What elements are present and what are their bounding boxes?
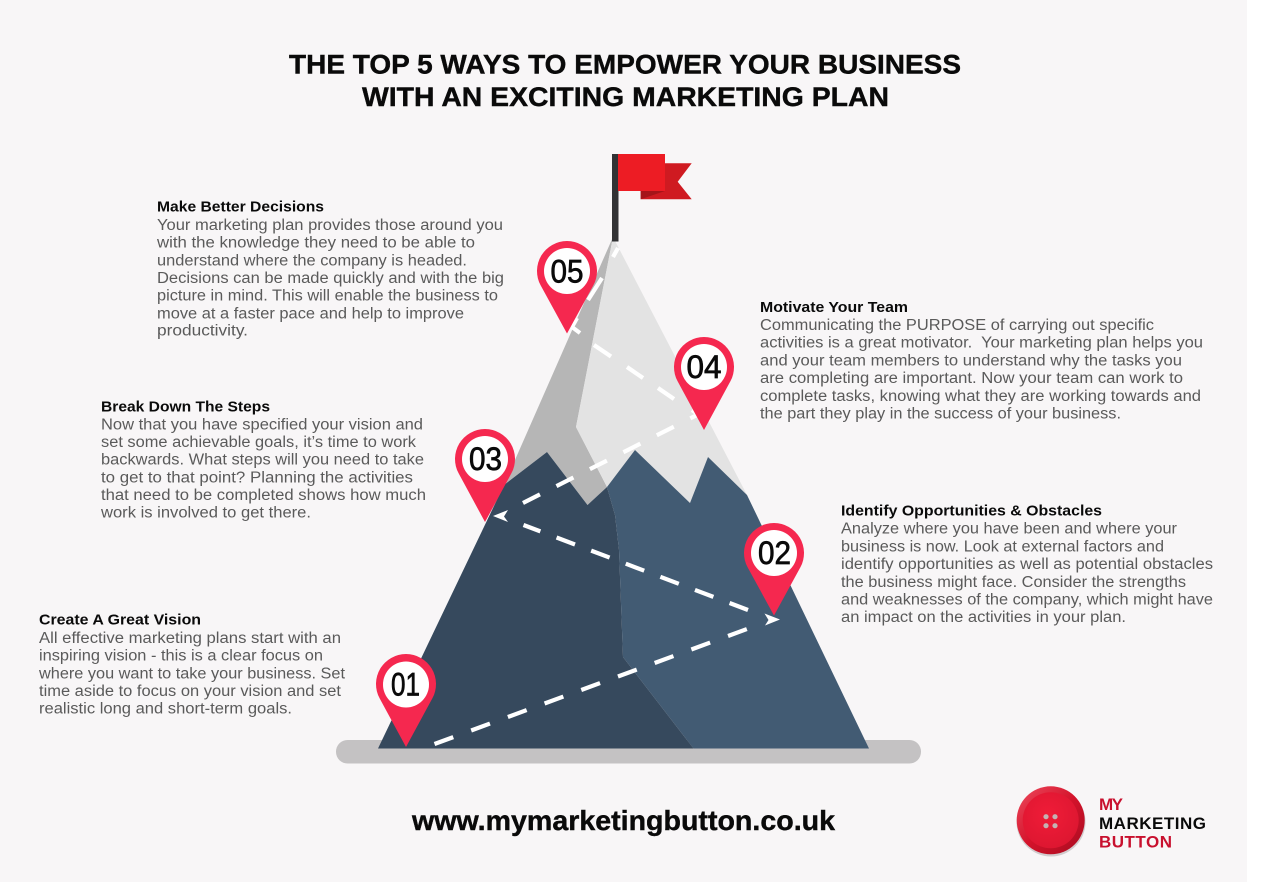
icon: red button: [1016, 786, 1086, 856]
text block: Make Better Decisions: productivity.: [157, 323, 248, 340]
mountain: right blue face: [607, 450, 869, 748]
flag front: [618, 154, 665, 191]
text block: Create A Great Vision: inspiring vision - this is a clear focus on: [39, 648, 323, 665]
text block: Motivate Your Team: [760, 299, 1203, 422]
text block: Create A Great Vision: Create A Great Vision: [39, 612, 201, 629]
dashed route path: [434, 248, 780, 744]
text block: Break Down The Steps: set some achievable goals, it’s time to work: [101, 434, 416, 451]
flag on summit: [612, 154, 692, 242]
title: THE TOP 5 WAYS TO EMPOWER YOUR BUSINESS: [289, 50, 961, 80]
text block: Motivate Your Team: are completing are important. Now your team can work to: [760, 370, 1183, 387]
text block: Break Down The Steps: work is involved to get there.: [100, 505, 311, 522]
text block: Make Better Decisions: [156, 199, 504, 340]
website url: www.mymarketingbutton.co.uk: [411, 805, 835, 836]
text block: Create A Great Vision: realistic long and short-term goals.: [39, 701, 292, 718]
route 04 to 05: [572, 327, 697, 414]
text block: Make Better Decisions: move at a faster pace and help to improve: [157, 305, 464, 322]
pin 04: [674, 337, 734, 430]
text block: Break Down The Steps: to get to that point? Planning the activities: [101, 469, 413, 486]
route 03 to 04: [523, 415, 697, 503]
pin 02: [744, 523, 804, 616]
text block: Create A Great Vision: All effective marketing plans start with an: [39, 630, 341, 647]
text block: Identify Opportunities & Obstacles: [841, 503, 1213, 626]
pin 05: 05: [550, 254, 584, 290]
route 01 to 02: [434, 614, 780, 744]
text block: Make Better Decisions: Decisions can be made quickly and with the big: [157, 270, 504, 287]
text block: Identify Opportunities & Obstacles: business is now. Look at external factors and: [841, 538, 1164, 555]
logo: [1016, 786, 1206, 856]
text block: Identify Opportunities & Obstacles: Analyze where you have been and where your: [841, 521, 1177, 538]
text block: Make Better Decisions: Your marketing plan provides those around you: [157, 217, 503, 234]
logo wordmark: BUTTON: [1099, 833, 1172, 852]
logo wordmark: [1099, 795, 1206, 852]
route 02 to 03: [493, 510, 748, 610]
text block: Break Down The Steps: Break Down The Steps: [101, 399, 270, 416]
text block: Make Better Decisions: picture in mind. This will enable the business to: [157, 288, 498, 305]
mountain: left dark face: [378, 452, 694, 748]
text block: Create A Great Vision: [38, 612, 346, 718]
mountain illustration: [378, 237, 869, 748]
logo wordmark: MARKETING: [1099, 814, 1206, 833]
text block: Create A Great Vision: where you want to take your business. Set: [38, 665, 346, 682]
pin 01: 01: [391, 666, 420, 702]
text block: Break Down The Steps: Now that you have specified your vision and: [101, 416, 423, 433]
text block: Motivate Your Team: and your team members to understand why the tasks you: [760, 352, 1182, 369]
flag fold shadow: [641, 191, 665, 199]
text block: Motivate Your Team: Communicating the PURPOSE of carrying out specific: [760, 317, 1154, 334]
text block: Make Better Decisions: understand where the company is headed.: [157, 252, 467, 269]
pin 04: 04: [686, 349, 722, 385]
text block: Motivate Your Team: activities is a great motivator. Your marketing plan helps you: [760, 335, 1203, 352]
title: WITH AN EXCITING MARKETING PLAN: [362, 82, 889, 112]
text block: Break Down The Steps: [100, 399, 426, 522]
logo wordmark: MY: [1099, 795, 1124, 814]
snow cap: light face: [576, 237, 747, 503]
route 05 to summit: [572, 248, 618, 327]
text block: Motivate Your Team: the part they play in the success of your business.: [760, 405, 1121, 422]
text block: Motivate Your Team: complete tasks, knowing what they are working towards and: [760, 388, 1201, 405]
ground bar: [336, 740, 921, 764]
pin 05: [537, 241, 597, 334]
text block: Make Better Decisions: with the knowledge they need to be able to: [156, 235, 475, 252]
text block: Create A Great Vision: time aside to focus on your vision and set: [39, 683, 342, 700]
text block: Identify Opportunities & Obstacles: identify opportunities as well as potential obstacles: [841, 556, 1213, 573]
text block: Make Better Decisions: Make Better Decisions: [157, 199, 324, 216]
pin 01: [376, 654, 436, 747]
text block: Identify Opportunities & Obstacles: Identify Opportunities & Obstacles: [841, 503, 1102, 520]
text block: Motivate Your Team: Motivate Your Team: [760, 299, 908, 316]
snow cap: shaded face: [504, 237, 613, 505]
pin 02: 02: [758, 535, 791, 571]
flag back tail: [641, 163, 692, 199]
text block: Identify Opportunities & Obstacles: and weaknesses of the company, which might have: [841, 592, 1213, 608]
text block: Break Down The Steps: backwards. What steps will you need to take: [101, 452, 424, 469]
flag pole: [612, 154, 618, 242]
text block: Identify Opportunities & Obstacles: the business might face. Consider the strengths: [841, 574, 1186, 591]
pin 03: 03: [469, 441, 502, 477]
text block: Identify Opportunities & Obstacles: an impact on the activities in your plan.: [841, 609, 1126, 626]
text block: Break Down The Steps: that need to be completed shows how much: [101, 487, 426, 504]
title: [289, 50, 961, 112]
pin 03: [455, 429, 515, 522]
